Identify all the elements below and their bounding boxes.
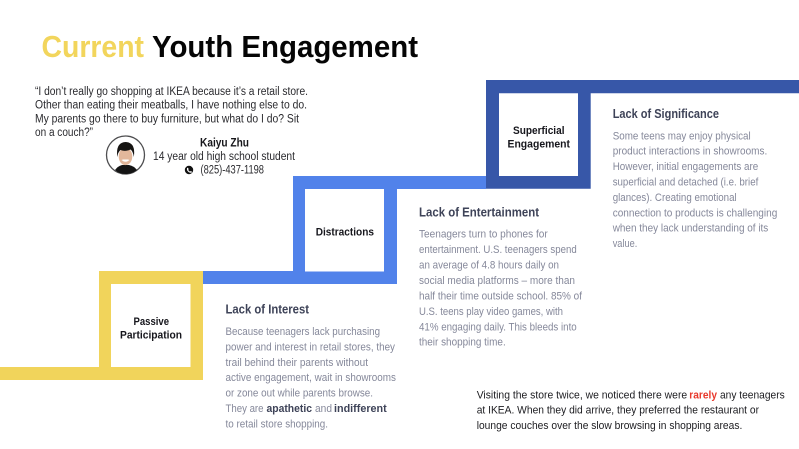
attribution: Kaiyu Zhu: 14 year old high school student <box>153 151 296 163</box>
title: Current <box>42 29 144 64</box>
text block: store visit observation: Visiting the store twice, we noticed there were <box>477 389 687 401</box>
text block: Lack of Interest <box>226 302 396 430</box>
text block: Lack of Entertainment: Lack of Entertainment <box>419 206 540 220</box>
text block: Lack of Significance: Lack of Significance <box>613 107 719 121</box>
text block: Lack of Interest: They are <box>226 403 264 415</box>
text block: Lack of Entertainment: their shopping time. <box>419 337 506 349</box>
text block: Lack of Entertainment: 41% engaging daily. This bleeds into <box>419 321 577 333</box>
text block: Lack of Interest: Because teenagers lack purchasing <box>226 326 380 338</box>
quote: My parents go there to buy furniture, but what do I do? Sit <box>35 113 300 125</box>
text block: Lack of Interest: and <box>315 403 332 415</box>
attribution: Kaiyu Zhu: (825)-437-1198 <box>200 164 264 176</box>
text block: Lack of Interest: indifferent <box>334 403 387 415</box>
text block: store visit observation: any teenagers <box>720 389 785 401</box>
text block: Lack of Significance: superficial and detached (i.e. brief <box>613 176 759 188</box>
label: Superficial Engagement <box>508 125 570 151</box>
label: Passive Participation <box>120 316 182 342</box>
quote: Other than eating their meatballs, I have nothing else to do. <box>35 100 307 112</box>
quote: on a couch?” <box>35 127 93 139</box>
text block: store visit observation: at IKEA. When they did arrive, they preferred the restaurant or <box>477 405 759 417</box>
text block: Lack of Entertainment: half their time outside school. 85% of <box>419 290 583 302</box>
text block: Lack of Significance: value. <box>613 238 637 250</box>
text block: Lack of Entertainment <box>419 206 583 349</box>
text block: Lack of Entertainment: social media platforms – more than <box>419 275 575 287</box>
attribution: Kaiyu Zhu <box>153 138 296 176</box>
text block: Lack of Interest: power and interest in retail stores, they <box>226 341 395 353</box>
text block: Lack of Interest: or zone out while parents browse. <box>226 388 373 400</box>
label: Passive Participation: Participation <box>120 330 182 342</box>
label: Superficial Engagement: Engagement <box>508 139 570 151</box>
text block: store visit observation: rarely <box>689 389 718 401</box>
text block: Lack of Significance: However, initial engagements are <box>613 161 758 173</box>
title: Youth Engagement <box>152 29 418 64</box>
text block: Lack of Interest: to retail store shopping. <box>226 418 328 430</box>
text block: Lack of Entertainment: entertainment. U.S. teenagers spend <box>419 244 577 256</box>
text block: Lack of Entertainment: Teenagers turn to phones for <box>419 229 548 241</box>
quote <box>35 86 308 139</box>
label: Distractions: Distractions <box>316 227 374 239</box>
label: Superficial Engagement: Superficial <box>513 125 564 137</box>
text block: Lack of Interest: Lack of Interest <box>226 302 310 316</box>
text block: Lack of Interest: active engagement, wait in showrooms <box>226 372 396 384</box>
quote: “I don’t really go shopping at IKEA because it’s a retail store. <box>35 86 308 98</box>
attribution: Kaiyu Zhu: Kaiyu Zhu <box>200 138 249 150</box>
text block: Lack of Significance: when they lack understanding of its <box>612 223 769 235</box>
text block: Lack of Significance: product interactions in showrooms. <box>613 146 767 158</box>
text block: Lack of Interest: trail behind their parents without <box>226 357 368 369</box>
stair: yellow step <box>0 271 203 380</box>
title <box>42 29 418 64</box>
text block: Lack of Significance: connection to products is challenging <box>613 207 777 219</box>
stair: blue step <box>203 176 486 284</box>
text block: Lack of Significance: glances). Creating emotional <box>613 192 737 204</box>
icon: portrait of Kaiyu Zhu <box>106 136 144 174</box>
text block: Lack of Entertainment: U.S. teens play video games, with <box>419 306 563 318</box>
text block: Lack of Interest: apathetic <box>266 403 312 415</box>
icon: phone <box>185 166 193 174</box>
text block: Lack of Entertainment: an average of 4.8 hours daily on <box>419 260 559 272</box>
text block: Lack of Significance: Some teens may enjoy physical <box>613 130 751 142</box>
text block: store visit observation: lounge couches over the slow browsing in shopping areas. <box>477 420 742 432</box>
stair: dark blue step <box>486 80 799 189</box>
text block: store visit observation <box>477 389 785 432</box>
label: Passive Participation: Passive <box>134 316 169 328</box>
text block: Lack of Significance <box>612 107 777 250</box>
